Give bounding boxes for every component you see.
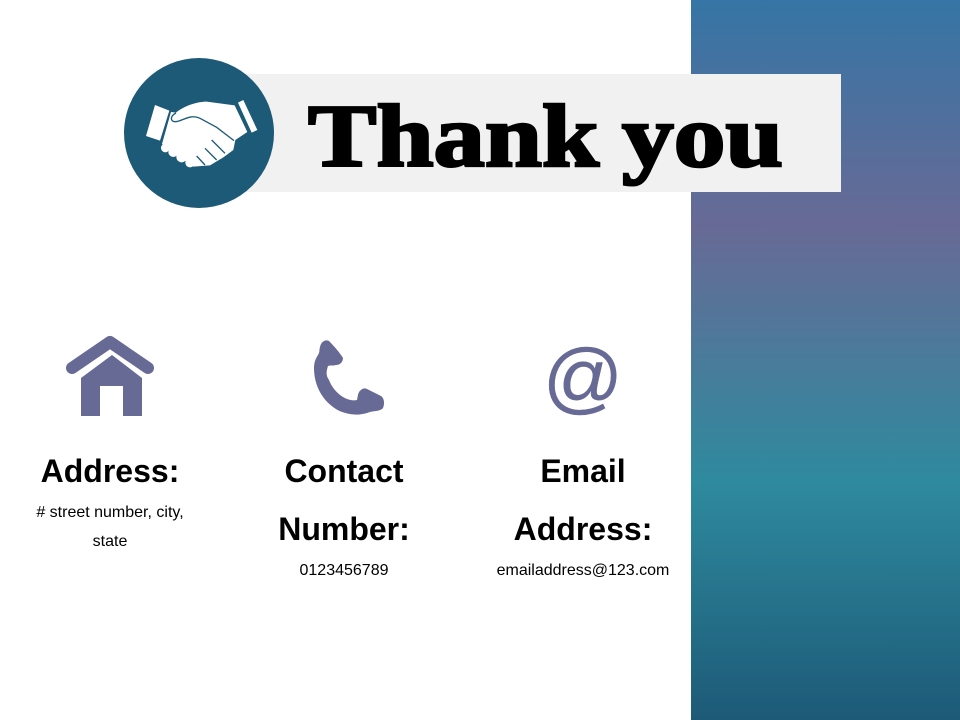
- icon: house: [66, 336, 154, 416]
- contact heading: Contact: [284, 453, 404, 489]
- contact heading: Number:: [278, 511, 410, 547]
- address block: [36, 453, 184, 550]
- icon: at sign: @: [543, 332, 623, 420]
- email text: emailaddress@123.com: [497, 562, 669, 579]
- title: you: [622, 88, 783, 186]
- side gradient panel: [691, 0, 960, 720]
- title banner: [240, 74, 841, 192]
- icon: handshake in circle: [124, 58, 274, 208]
- address text: [36, 504, 184, 550]
- email heading: Address:: [514, 511, 652, 547]
- title: Thank: [308, 88, 600, 186]
- address heading: Address:: [41, 453, 179, 489]
- contact heading: [278, 453, 410, 547]
- address text: state: [93, 533, 127, 550]
- icon: phone: [314, 340, 384, 415]
- address text: # street number, city,: [36, 504, 184, 521]
- title: [308, 88, 783, 186]
- email heading: [514, 453, 652, 547]
- email heading: Email: [540, 453, 626, 489]
- contact text: 0123456789: [300, 562, 388, 579]
- contact block: [278, 453, 410, 579]
- email block: [497, 453, 669, 579]
